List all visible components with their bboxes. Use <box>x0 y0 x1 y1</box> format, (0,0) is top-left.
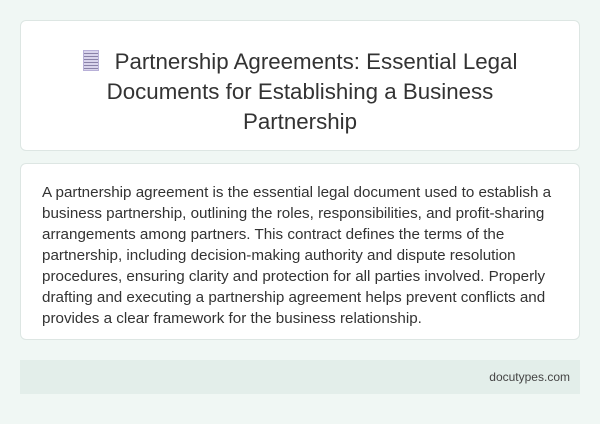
title card <box>20 20 580 151</box>
footer source text: docutypes.com <box>489 370 570 384</box>
description text: A partnership agreement is the essential legal document used to establish a business partnership, outlining the roles, responsibilities, and profit-sharing arrangements among partners. This contract defines the terms of the partnership, including decision-making authority and dispute resolution procedures, ensuring clarity and protection for all parties involved. Properly drafting and executing a partnership agreement helps prevent conflicts and provides a clear framework for the business relationship. <box>42 184 551 327</box>
title: Partnership Agreements: Essential Legal Documents for Establishing a Business Partnership <box>107 49 517 134</box>
footer <box>20 360 580 394</box>
icon: document <box>83 50 99 71</box>
description panel <box>20 163 580 340</box>
